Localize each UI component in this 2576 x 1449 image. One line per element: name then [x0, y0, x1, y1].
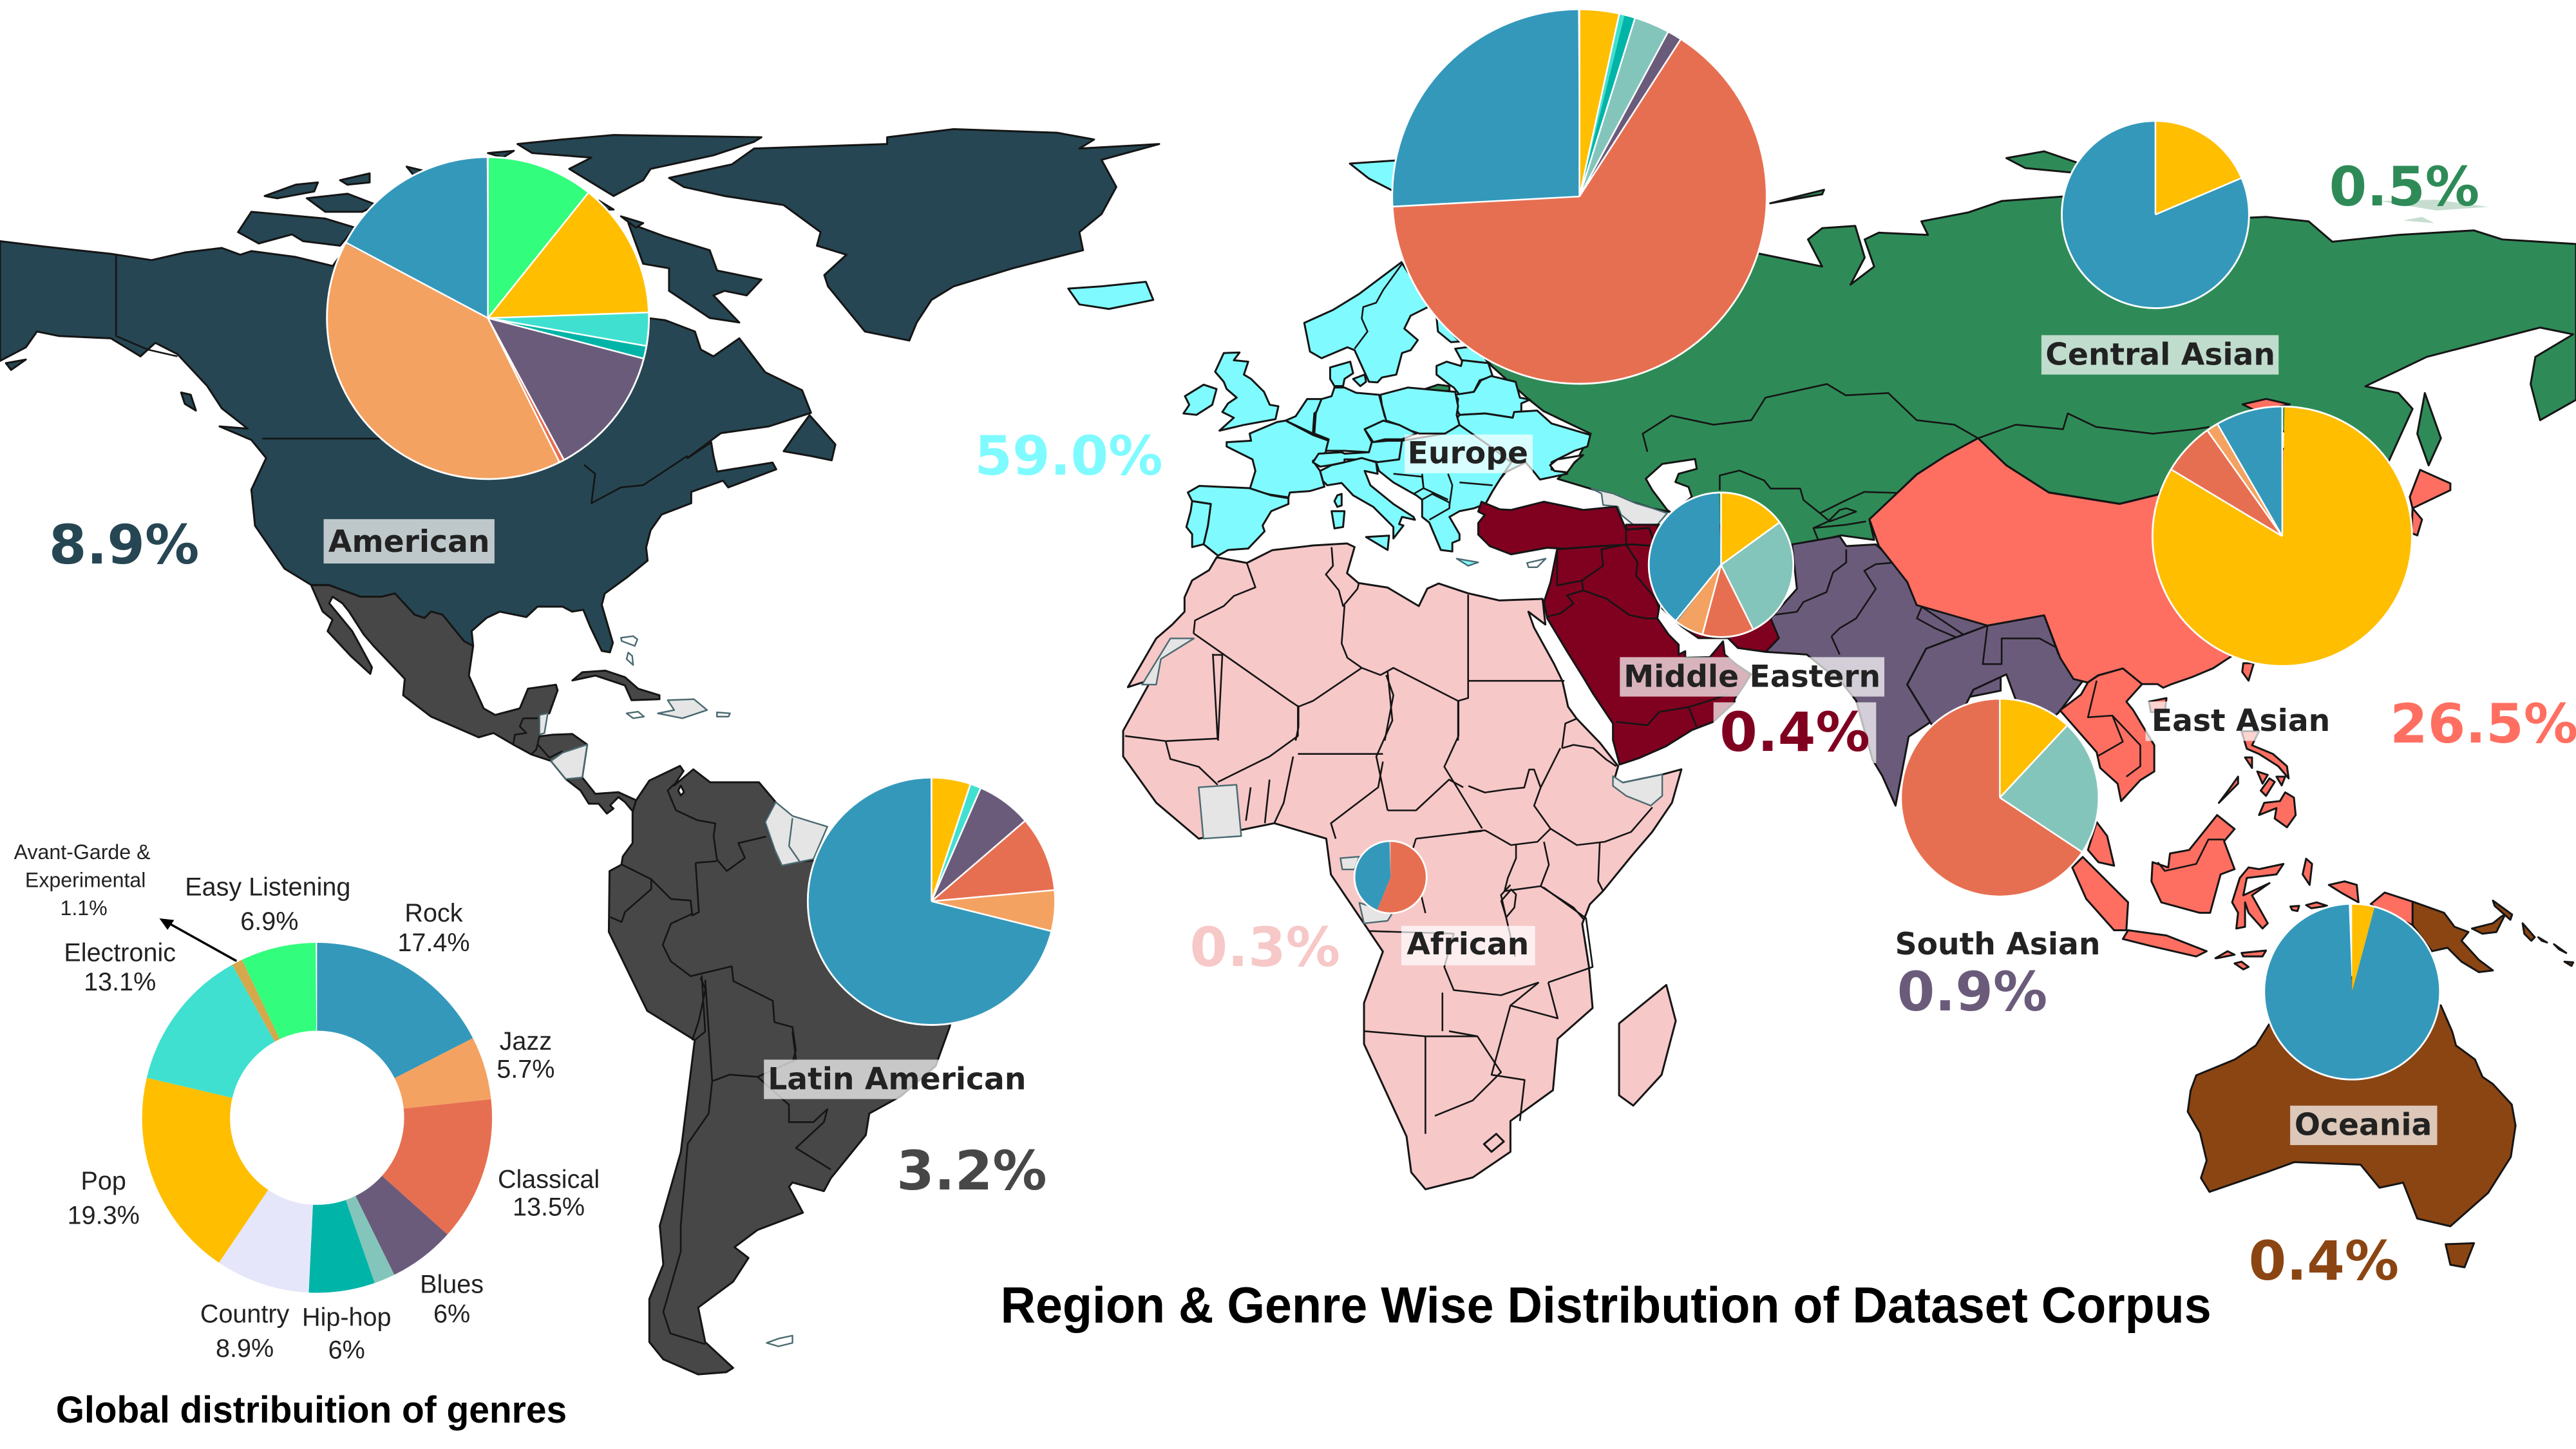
region: North America (American): [0, 129, 1159, 652]
pie: Europe: [1392, 9, 1766, 384]
region: Oceania: [2188, 900, 2573, 1267]
label: Hip-hop 6%: Hip-hop: [302, 1303, 391, 1332]
label: Jazz 5.7%: Jazz: [500, 1027, 552, 1056]
label: Oceania: Oceania: [2295, 1108, 2432, 1143]
percent box: Middle Eastern backdrop: [1714, 703, 1876, 763]
label: Classical 13.5%: Classical: [498, 1165, 600, 1193]
east India, Bangladesh and Myanmar: [1907, 615, 2082, 746]
label: Avant-Garde & Experimental 1.1%: 1.1%: [60, 896, 108, 920]
pie: American: [327, 157, 649, 479]
label: Country 8.9%: Country: [200, 1300, 290, 1329]
pie: Middle Eastern: [1649, 493, 1794, 637]
percent: South Asian 0.9%: 0.9%: [1897, 960, 2047, 1023]
label: East Asian: East Asian: [2152, 703, 2330, 739]
pie: East Asian: [2152, 406, 2412, 666]
region: Africa: [1123, 544, 1681, 1189]
label: Country 8.9%: 8.9%: [216, 1334, 274, 1363]
South America north borders: [610, 784, 796, 1063]
label: Rock 17.4%: 17.4%: [397, 929, 470, 957]
label: Middle Eastern: Middle Eastern: [1624, 659, 1880, 694]
Papua New Guinea and Melanesia: [2412, 900, 2573, 972]
arrow: Avant-Garde slice to label: [159, 918, 236, 961]
label: American: American: [328, 524, 489, 560]
donut chart: global genre distribution: [186, 987, 448, 1249]
region: Middle Eastern: [1478, 502, 1784, 764]
pie: African: [1354, 841, 1426, 913]
pie: Central Asian: [2062, 121, 2249, 308]
region: South Asian: [1766, 536, 2082, 806]
European countries: [1184, 262, 1590, 567]
Svalbard: [1350, 160, 1397, 192]
heading: main title: Region & Genre Wise Distribution of Dataset Corpus: [1001, 1276, 2211, 1334]
region: South America (Latin American): [609, 766, 978, 1374]
percent: African 0.3%: 0.3%: [1190, 916, 1340, 979]
label: Easy Listening 6.9%: 6.9%: [240, 907, 298, 936]
label: Rock 17.4%: Rock: [404, 899, 463, 927]
pie: Latin American: [808, 777, 1056, 1025]
Horn and East Africa borders: [1468, 719, 1662, 919]
label: Electronic 13.1%: 13.1%: [84, 968, 156, 996]
label: Latin American: Latin American: [768, 1061, 1026, 1097]
label: Hip-hop 6%: 6%: [328, 1336, 365, 1365]
Pakistan, Afghanistan and west India: [1766, 536, 2001, 806]
label: Pop 19.3%: Pop: [81, 1167, 126, 1195]
percent: Central Asian 0.5%: 0.5%: [2329, 155, 2479, 218]
Africa outline and lower borders: [1123, 544, 1681, 1189]
label: Classical 13.5%: 13.5%: [513, 1193, 585, 1222]
label: Blues 6%: Blues: [420, 1271, 484, 1299]
North Africa borders: [1193, 547, 1564, 741]
China: [1870, 438, 2323, 688]
label: Electronic 13.1%: Electronic: [64, 938, 176, 967]
label: Blues 6%: 6%: [433, 1300, 470, 1329]
percent: Latin American 3.2%: 3.2%: [896, 1139, 1047, 1202]
label: African: African: [1406, 927, 1529, 962]
pie: Oceania: [2264, 904, 2440, 1079]
percent: Middle Eastern 0.4%: 0.4%: [1719, 701, 1870, 764]
Caspian Sea, Caucasus and Central Asia borders: [1591, 459, 1915, 544]
label: Easy Listening 6.9%: Easy Listening: [185, 873, 350, 901]
region: Central Asian (Russia, Kazakhstan, Mongolia): [1416, 151, 2576, 546]
percent: Oceania 0.4%: 0.4%: [2249, 1229, 2399, 1293]
label: Central Asian: Central Asian: [2045, 337, 2275, 372]
label: South Asian: South Asian: [1895, 927, 2100, 962]
Southeast Asia: [2060, 663, 2412, 969]
region: East Asian: [1870, 399, 2450, 969]
Australia and Tasmania: [2188, 977, 2515, 1267]
Iceland: [1068, 282, 1153, 309]
Japan and Korea: [2242, 399, 2450, 535]
percent: Europe 59.0%: 59.0%: [974, 424, 1162, 488]
label: Europe: Europe: [1408, 435, 1528, 471]
label: Avant-Garde & Experimental 1.1%: Avant-Garde &: [14, 840, 151, 864]
region: Mexico, Central America and Caribbean: [311, 585, 730, 813]
percent: American 8.9%: 8.9%: [49, 513, 199, 576]
heading: donut title: Global distribuition of genres: [56, 1389, 567, 1431]
donut labels: [14, 840, 600, 1365]
label: Jazz 5.7%: 5.7%: [497, 1055, 554, 1083]
pie: South Asian: [1901, 699, 2099, 896]
label: Avant-Garde & Experimental 1.1%: Experimental: [25, 869, 146, 892]
Russia and Central Asia landmass: [1416, 151, 2576, 546]
region: Europe: [1068, 160, 1590, 567]
percent: East Asian 26.5%: 26.5%: [2390, 692, 2576, 755]
label: Pop 19.3%: 19.3%: [68, 1202, 140, 1230]
